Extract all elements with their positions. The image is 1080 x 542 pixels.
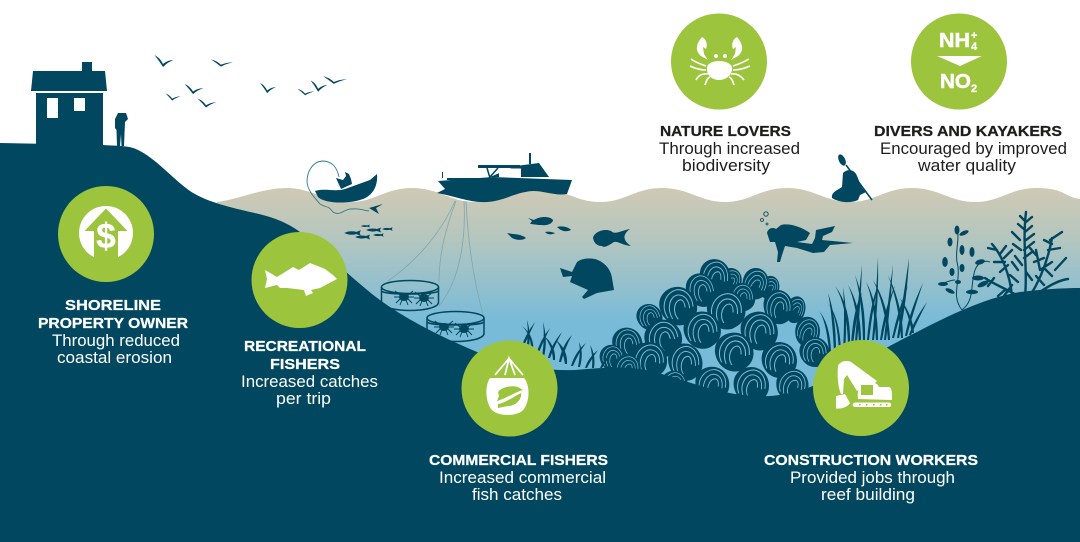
house (31, 62, 107, 147)
small fish school (344, 224, 393, 240)
icon: dollar house (58, 186, 154, 282)
icon: crab (671, 14, 767, 110)
label: construction workers: Provided jobs through (790, 468, 955, 487)
seaweed plant (938, 226, 990, 310)
reef fish (507, 217, 631, 299)
seagrass: centre (818, 257, 927, 352)
label: divers and kayakers: Encouraged by improved (880, 139, 1067, 158)
birds (154, 55, 347, 108)
label: nature lovers: NATURE LOVERS (660, 124, 791, 140)
icon: fish in net (462, 340, 558, 436)
label: divers and kayakers: water quality (917, 156, 1017, 175)
label: construction workers: reef building (821, 485, 915, 504)
icon: nitrogen conversion (911, 14, 1007, 110)
label: recreational fishers: Increased catches (241, 372, 378, 391)
label: shoreline property owner (38, 298, 189, 367)
person with binoculars (115, 113, 128, 146)
label: recreational fishers: RECREATIONAL (244, 339, 366, 355)
commercial boat (437, 153, 572, 202)
label: recreational fishers: per trip (276, 389, 331, 408)
label: shoreline property owner: Through reduced (52, 331, 180, 350)
label: nature lovers: biodiversity (682, 156, 771, 175)
label: divers and kayakers: DIVERS AND KAYAKERS (874, 124, 1062, 140)
label: shoreline property owner: PROPERTY OWNER (38, 316, 189, 332)
label: divers and kayakers (874, 124, 1067, 175)
label: commercial fishers: fish catches (472, 485, 562, 504)
icon: nitrogen conversion: + (971, 30, 977, 42)
water body (217, 188, 1080, 420)
ropes to traps (388, 201, 483, 315)
icon: nitrogen conversion: 2 (971, 83, 977, 95)
icon: nitrogen conversion: NH (939, 30, 970, 52)
label: nature lovers (659, 124, 800, 175)
crab trap 2 (427, 312, 484, 342)
bushy seaweed (985, 212, 1068, 296)
icon: nitrogen conversion: NO (940, 71, 971, 93)
icon: excavator (813, 340, 909, 436)
label: commercial fishers: COMMERCIAL FISHERS (429, 453, 608, 469)
seabed and hill (0, 143, 1080, 542)
label: commercial fishers: Increased commercial (439, 468, 606, 487)
crab trap 1 (382, 280, 438, 310)
label: recreational fishers: FISHERS (270, 357, 340, 373)
icon: dollar house: $ (96, 217, 116, 256)
oyster reef (596, 257, 833, 406)
label: nature lovers: Through increased (659, 139, 800, 158)
seagrass: left (521, 320, 612, 368)
fishing rowboat with angler (307, 161, 383, 214)
label: commercial fishers (429, 453, 608, 504)
icon: fish (252, 232, 348, 328)
label: shoreline property owner: SHORELINE (65, 298, 161, 314)
scuba diver (760, 212, 853, 262)
label: construction workers (764, 453, 978, 504)
label: recreational fishers (241, 339, 378, 408)
kayaker (832, 153, 872, 202)
label: shoreline property owner: coastal erosion (57, 348, 172, 367)
icon: nitrogen conversion: 4 (971, 41, 978, 53)
label: construction workers: CONSTRUCTION WORKERS (764, 453, 978, 469)
